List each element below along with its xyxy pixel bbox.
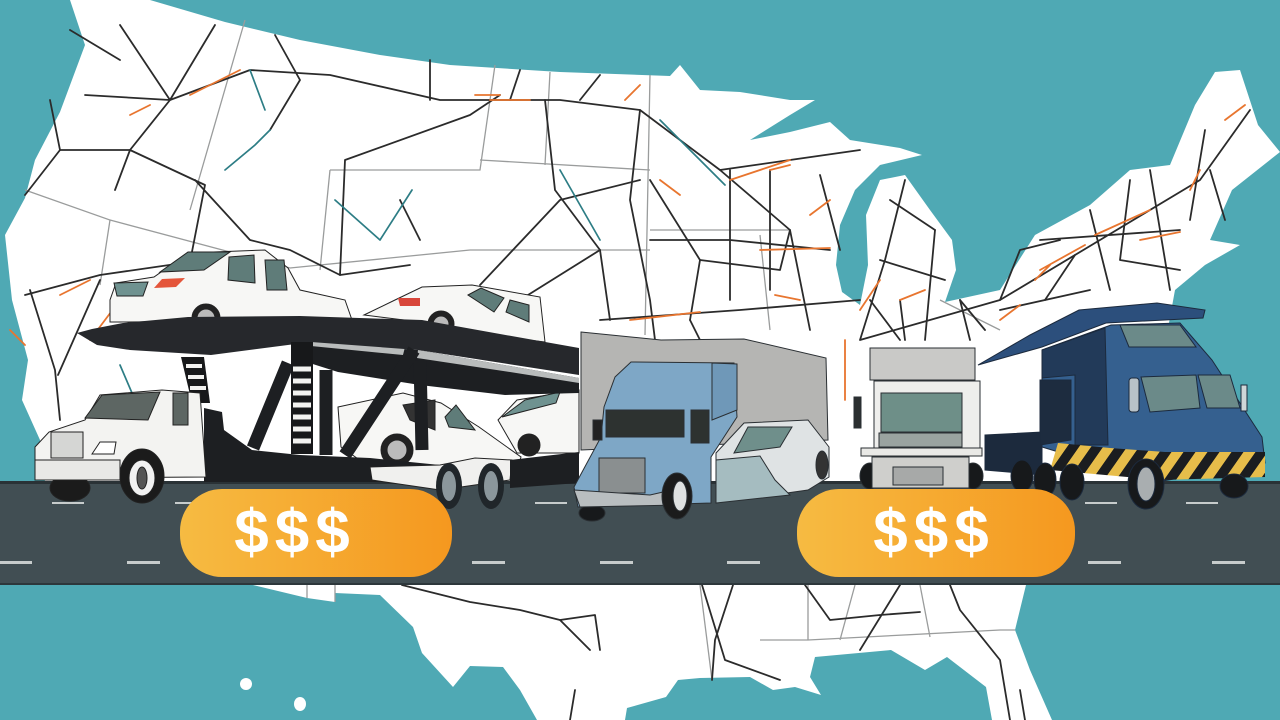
highways: orange segments	[10, 70, 1245, 400]
carrier: lower deck	[300, 342, 579, 395]
carrier: chassis	[204, 408, 440, 482]
map: islands	[240, 678, 306, 711]
price text: right: $$$	[873, 498, 995, 567]
vehicle: white car on lower deck	[338, 390, 579, 480]
carrier: rear frame and wheels	[370, 452, 579, 509]
price badge: left	[180, 489, 452, 577]
carrier: center ladder	[291, 342, 313, 454]
vehicle: white car on upper deck, rear	[110, 250, 352, 332]
vehicle: blue semi with grey box	[574, 332, 829, 521]
blue truck: hazard stripes	[1050, 443, 1265, 480]
vehicle: blue truck	[978, 303, 1265, 509]
blue truck: roof awning	[978, 303, 1205, 365]
map: state borders	[25, 20, 1110, 680]
highway road	[0, 481, 1280, 585]
semi: silver car	[716, 420, 829, 503]
vehicle: car carrier trailer	[77, 316, 579, 509]
price text: left: $$$	[234, 498, 356, 567]
vehicle: white box truck	[854, 348, 983, 489]
vehicle: white carrier cab	[35, 390, 206, 503]
carrier: support struts	[253, 350, 422, 455]
road: lane dashes	[0, 502, 1245, 564]
highways: teal segments	[120, 70, 725, 400]
blue truck: wheels	[1011, 459, 1248, 509]
price badge: right	[797, 489, 1075, 577]
carrier: left ladder	[181, 357, 210, 403]
vehicle: white car on upper deck, front	[364, 285, 545, 342]
carrier: upper deck	[77, 316, 579, 375]
